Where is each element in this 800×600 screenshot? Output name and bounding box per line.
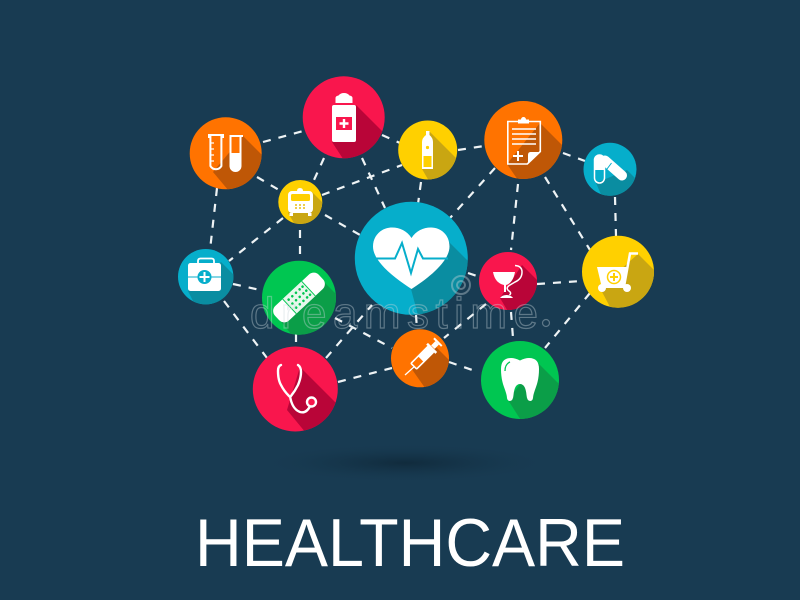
icon: tooth [481, 341, 559, 419]
icon: pills [584, 142, 636, 196]
icon: stethoscope [252, 346, 338, 432]
watermark: dreamstime [250, 289, 538, 338]
icon: clipboard [484, 101, 562, 179]
icon: syringe [391, 329, 449, 388]
icon: first-aid kit [178, 249, 234, 304]
title: HEALTHCARE [195, 505, 625, 581]
icon: heart with pulse [354, 202, 468, 315]
icon: bowl of Hygieia [479, 252, 537, 310]
icon: shopping cart [582, 236, 654, 308]
ground shadow [255, 443, 555, 483]
icon: ambulance [278, 180, 322, 224]
icon: adhesive bandage [262, 260, 336, 335]
icon: small bottle [398, 120, 458, 180]
network of dashed connectors [210, 131, 616, 382]
icon: medicine bottle [302, 76, 385, 158]
icon: test tubes [190, 117, 262, 190]
